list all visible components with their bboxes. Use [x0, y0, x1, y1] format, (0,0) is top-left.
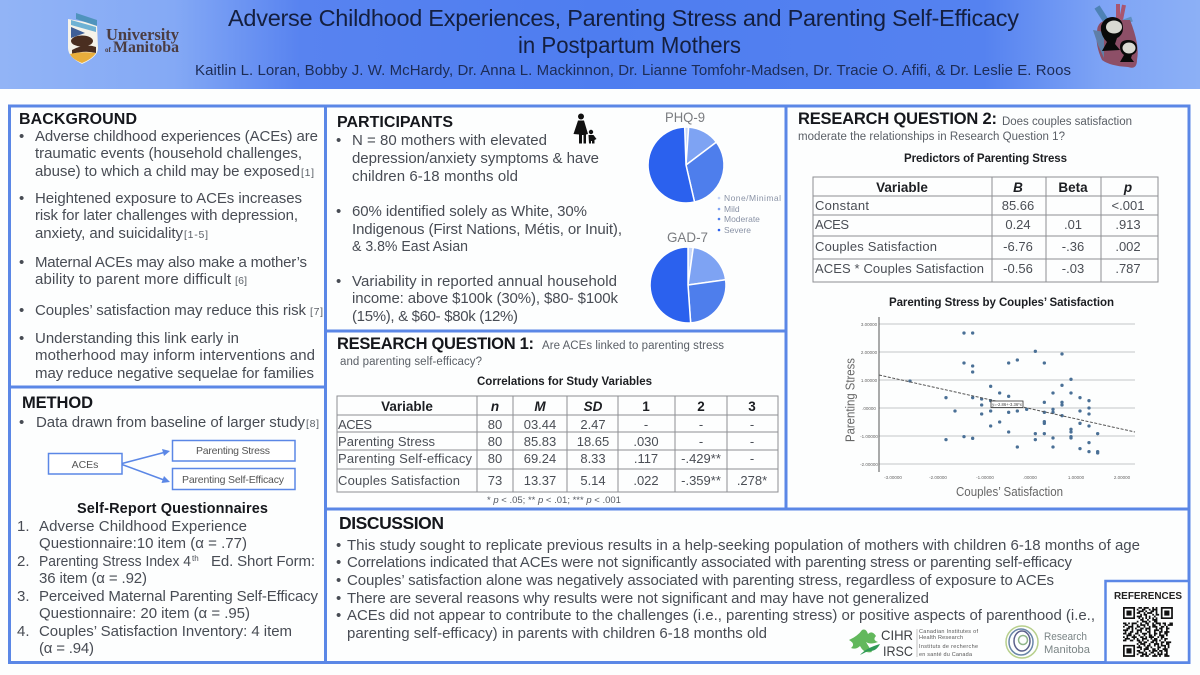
discussion bullet list: • [336, 537, 341, 554]
correlations table: 3 [748, 399, 756, 414]
heading: research question 1: and parenting self-efficacy? [340, 356, 482, 368]
correlations table: M [534, 399, 546, 414]
background bullet list: motherhood may inform interventions and [35, 347, 315, 364]
background bullet list: Heightened exposure to ACEs increases [35, 190, 302, 207]
scatter plot: parenting stress by couples' satisfaction: 1.00000 [861, 378, 878, 383]
questionnaire list: Couples’ Satisfaction Inventory: 4 item [39, 623, 292, 640]
predictors table: Variable [876, 180, 928, 195]
participants bullet list: (15%), & $60- $80k (12%) [352, 308, 518, 325]
predictors table: 85.66 [1002, 198, 1034, 213]
scatter plot: parenting stress by couples' satisfaction: -3.00000 [884, 475, 902, 480]
logo: University of Manitoba: of [105, 46, 112, 54]
box: parenting stress [172, 440, 295, 461]
logo: University of Manitoba [68, 13, 180, 64]
background bullet list: • [19, 190, 24, 207]
background bullet list: may reduce negative sequelae for families [35, 365, 314, 382]
heading: research question 2: Does couples satisfaction [1002, 116, 1132, 128]
authors: Kaitlin L. Loran, Bobby J. W. McHardy, Dr. Anna L. Mackinnon, Dr. Lianne Tomfohr-Madsen, Dr. Tracie O. Afifi, & Dr. Leslie E. Roos [195, 62, 1071, 79]
correlations table: 5.14 [580, 473, 606, 488]
participants bullet list: children 6-18 months old [352, 168, 518, 185]
correlations table: Parenting Stress [338, 434, 436, 449]
correlations table: .117 [634, 451, 658, 466]
questionnaire list: Ed. Short Form: [211, 553, 315, 570]
correlations table: - [644, 417, 648, 432]
heading: research question 1: Are ACEs linked to parenting stress [542, 340, 724, 352]
background bullet list: [6] [235, 275, 247, 287]
scatter plot: parenting stress by couples' satisfaction: Parenting Stress [844, 358, 858, 442]
panel: research question 1 [326, 331, 786, 509]
pie chart: PHQ-9 [648, 109, 724, 203]
correlations table: .022 [633, 473, 659, 488]
predictors table: Constant [815, 198, 869, 213]
participants bullet list: • [336, 203, 341, 220]
questionnaire list: (α = .94) [39, 640, 94, 657]
logo: CIHR IRSC: Health Research [919, 635, 963, 641]
scatter plot: parenting stress by couples' satisfaction: -1.00000 [976, 475, 994, 480]
panel: background [10, 106, 326, 387]
questionnaire list [17, 518, 318, 657]
correlations table: .030 [633, 434, 659, 449]
heading: discussion: DISCUSSION [339, 513, 444, 533]
discussion bullet list [336, 537, 1140, 642]
predictors table: ACES [815, 217, 849, 232]
background bullet list: Maternal ACEs may also make a mother’s [35, 254, 307, 271]
predictors table: .01 [1064, 217, 1082, 232]
predictors table: Beta [1058, 180, 1088, 195]
correlations table: 8.33 [580, 451, 606, 466]
discussion bullet list: • [336, 554, 341, 571]
box: ACEs [48, 454, 122, 474]
correlations table: 69.24 [524, 451, 556, 466]
predictors table: Couples Satisfaction [815, 239, 937, 254]
logo: CIHR IRSC: Instituts de recherche [919, 644, 978, 650]
heading: participants: PARTICIPANTS [337, 114, 453, 131]
correlations table [337, 396, 778, 492]
scatter plot: parenting stress by couples' satisfaction: .00000 [862, 406, 876, 411]
panel: references with QR code: REFERENCES [1114, 590, 1182, 602]
predictors table [813, 177, 1158, 282]
scatter plot: parenting stress by couples' satisfaction: -2.00000 [860, 462, 878, 467]
questionnaire list: Adverse Childhood Experience [39, 518, 247, 535]
logo: CIHR IRSC: en santé du Canada [919, 652, 973, 658]
discussion bullet list: • [336, 607, 341, 624]
predictors table: .002 [1115, 239, 1141, 254]
participants bullet list: Indigenous (First Nations, Métis, or Inuit), [352, 221, 622, 238]
discussion bullet list: parenting self-efficacy) in parents with children 6-18 months old [347, 625, 767, 642]
background bullet list: • [19, 254, 24, 271]
correlations table: 18.65 [577, 434, 609, 449]
scatter plot: parenting stress by couples' satisfaction: -2.00000 [929, 475, 947, 480]
logo: Research Manitoba [1006, 626, 1091, 658]
panel: discussion [326, 509, 1189, 662]
correlations table: - [699, 434, 703, 449]
box: parenting self-efficacy: Parenting Self-Efficacy [182, 474, 285, 486]
subheading: self-report questionnaires: Self-Report Questionnaires [77, 501, 268, 517]
scatter plot: parenting stress by couples' satisfaction [844, 317, 1135, 499]
box: parenting stress: Parenting Stress [196, 445, 270, 457]
scatter plot: parenting stress by couples' satisfaction: Couples’ Satisfaction [956, 485, 1063, 499]
background bullet list: [1-5] [184, 229, 208, 241]
box: parenting self-efficacy [172, 468, 295, 490]
correlations table: 03.44 [524, 417, 556, 432]
correlations table: Couples Satisfaction [338, 473, 460, 488]
arrow: ACEs to parenting self-efficacy [122, 464, 170, 483]
questionnaire list: 36 item (α = .92) [39, 570, 147, 587]
correlations table: SD [584, 399, 603, 414]
correlations table: -.429** [681, 451, 721, 466]
correlations table: 73 [488, 473, 502, 488]
correlations table: 80 [488, 417, 502, 432]
panel: participants [326, 106, 786, 331]
logo: CIHR IRSC: IRSC [883, 643, 913, 659]
correlations table: - [750, 417, 754, 432]
background bullet list: [1] [301, 167, 314, 179]
scatter plot: parenting stress by couples' satisfaction: -1.00000 [860, 434, 878, 439]
logo: University of Manitoba: University [106, 25, 180, 44]
title: in Postpartum Mothers [518, 32, 741, 58]
chart title: Parenting Stress by Couples’ Satisfaction [889, 297, 1114, 309]
predictors table: -.03 [1062, 261, 1084, 276]
correlations table: .278* [737, 473, 767, 488]
participants bullet list: & 3.8% East Asian [352, 238, 468, 255]
background bullet list: • [19, 330, 24, 347]
background bullet list: • [19, 302, 24, 319]
participants bullet list: depression/anxiety symptoms & have [352, 150, 599, 167]
scatter plot: parenting stress by couples' satisfaction: .00000 [1023, 475, 1037, 480]
correlations table: - [750, 451, 754, 466]
questionnaire list: Questionnaire:10 item (α = .77) [39, 535, 247, 552]
participants bullet list: income: above $100k (30%), $80- $100k [352, 290, 618, 307]
logo: CIHR IRSC: CIHR [881, 627, 913, 643]
questionnaire list: 4. [17, 623, 30, 640]
logo: Research Manitoba: Manitoba [1044, 644, 1091, 656]
predictors table: -6.76 [1003, 239, 1033, 254]
table title: correlations: Correlations for Study Variables [477, 376, 652, 388]
heading: background: BACKGROUND [19, 111, 137, 128]
scatter plot: parenting stress by couples' satisfaction: y=-2.86+-3.36*x [992, 402, 1023, 407]
arrow: ACEs to parenting stress [122, 449, 170, 464]
table footnote: * p < .05; ** p < .01; *** p < .001 [487, 495, 621, 506]
box: ACEs: ACEs [72, 459, 98, 471]
heading: research question 2: moderate the relationships in Research Question 1? [798, 131, 1065, 143]
logo: University of Manitoba: Manitoba [113, 39, 179, 56]
pie legend [718, 193, 781, 235]
background bullet list: abuse) to which a child may be exposed [35, 163, 300, 180]
participants bullet list: Variability in reported annual household [352, 273, 617, 290]
predictors table: -0.56 [1003, 261, 1033, 276]
correlations table: - [750, 434, 754, 449]
correlations table: 2.47 [580, 417, 606, 432]
logo: CIHR IRSC [849, 627, 978, 659]
pie chart: GAD-7 [650, 229, 726, 323]
predictors table: .787 [1115, 261, 1141, 276]
predictors table: B [1013, 180, 1023, 195]
background bullet list: Understanding this link early in [35, 330, 239, 347]
heading: research question 1: RESEARCH QUESTION 1: [337, 335, 534, 353]
background bullet list: anxiety, and suicidality [35, 225, 184, 242]
logo: CIHR IRSC: Canadian Institutes of [919, 629, 978, 635]
questionnaire list: Perceived Maternal Parenting Self-Efficacy [39, 588, 318, 605]
pie legend: Moderate [724, 214, 760, 224]
scatter plot: parenting stress by couples' satisfaction: 3.00000 [861, 322, 878, 327]
heading: research question 2 [798, 110, 1132, 143]
predictors table: p [1123, 180, 1132, 195]
diagram: ACEs predicting two outcomes [48, 440, 295, 490]
discussion bullet list: This study sought to replicate previous results in a help-seeking population of mothers with children 6-18 months of age [347, 537, 1140, 554]
predictors table: .913 [1115, 217, 1141, 232]
header banner [0, 0, 1200, 89]
predictors table: <.001 [1112, 198, 1144, 213]
heading: method: METHOD [22, 394, 93, 412]
heading: research question 1 [337, 335, 724, 368]
panel: research question 2 [786, 106, 1189, 509]
correlations table: n [491, 399, 499, 414]
correlations table: Parenting Self-efficacy [338, 451, 472, 466]
predictors table: ACES * Couples Satisfaction [815, 261, 984, 276]
pie legend: Mild [724, 204, 740, 214]
background bullet list: [7] [310, 306, 323, 318]
pie chart: PHQ-9: PHQ-9 [665, 109, 705, 125]
questionnaire list: 1. [17, 518, 30, 535]
title: Adverse Childhood Experiences, Parenting Stress and Parenting Self-Efficacy [228, 5, 1019, 31]
background bullet list: • [19, 128, 24, 145]
background bullet list: Adverse childhood experiences (ACEs) are [35, 128, 318, 145]
method bullet: • [19, 414, 24, 431]
logo: Research Manitoba: Research [1044, 631, 1087, 643]
icon: heart with two head silhouettes [1093, 4, 1138, 68]
icon: mother and child [574, 114, 596, 144]
heading: research question 2: RESEARCH QUESTION 2: [798, 110, 997, 128]
correlations table: - [699, 417, 703, 432]
correlations table: 1 [642, 399, 650, 414]
discussion bullet list: ACEs did not appear to contribute to the challenges (i.e., parenting stress) or positive aspects of parenthood (i.e., [347, 607, 1095, 624]
panel: method [10, 387, 326, 662]
discussion bullet list: • [336, 572, 341, 589]
background bullet list: Couples’ satisfaction may reduce this risk [35, 302, 306, 319]
questionnaire list: th [192, 554, 199, 563]
predictors table: -.36 [1062, 239, 1084, 254]
correlations table: 80 [488, 434, 502, 449]
title [228, 5, 1019, 58]
pie chart: GAD-7: GAD-7 [667, 229, 708, 245]
background bullet list: risk for later challenges with depression, [35, 207, 298, 224]
participants bullet list: N = 80 mothers with elevated [352, 132, 547, 149]
discussion bullet list: Couples’ satisfaction alone was negatively associated with parenting stress, regardless of exposure to ACEs [347, 572, 1054, 589]
background bullet list: ability to parent more difficult [35, 271, 232, 288]
participants bullet list: • [336, 273, 341, 290]
scatter plot: parenting stress by couples' satisfaction: 1.00000 [1068, 475, 1085, 480]
participants bullet list: 60% identified solely as White, 30% [352, 203, 587, 220]
questionnaire list: 3. [17, 588, 30, 605]
background bullet list [19, 128, 323, 382]
questionnaire list: Questionnaire: 20 item (α = .95) [39, 605, 250, 622]
pie legend: None/Minimal [724, 193, 781, 203]
correlations table: 2 [697, 399, 705, 414]
method bullet: [8] [306, 418, 319, 430]
correlations table: -.359** [681, 473, 721, 488]
questionnaire list: 2. [17, 553, 30, 570]
predictors table: 0.24 [1005, 217, 1031, 232]
participants bullet list: • [336, 132, 341, 149]
table title: predictors: Predictors of Parenting Stress [904, 153, 1067, 165]
questionnaire list: Parenting Stress Index 4 [39, 553, 191, 570]
panel: references with QR code [1106, 581, 1189, 662]
background bullet list: traumatic events (household challenges, [35, 145, 302, 162]
correlations table: Variable [381, 399, 433, 414]
participants bullet list [336, 132, 622, 325]
discussion bullet list: • [336, 590, 341, 607]
QR code [1123, 608, 1173, 656]
correlations table: 13.37 [524, 473, 556, 488]
discussion bullet list: There are several reasons why results were not significant and may have not generalized [347, 590, 929, 607]
correlations table: 85.83 [524, 434, 556, 449]
discussion bullet list: Correlations indicated that ACEs were not significantly associated with parenting stress or parenting self-efficacy [347, 554, 1072, 571]
pie legend: Severe [724, 225, 751, 235]
method bullet: Data drawn from baseline of larger study [36, 414, 306, 431]
correlations table: ACES [338, 417, 372, 432]
scatter plot: parenting stress by couples' satisfaction: 2.00000 [861, 350, 878, 355]
correlations table: 80 [488, 451, 502, 466]
scatter plot: parenting stress by couples' satisfaction: 2.00000 [1114, 475, 1131, 480]
